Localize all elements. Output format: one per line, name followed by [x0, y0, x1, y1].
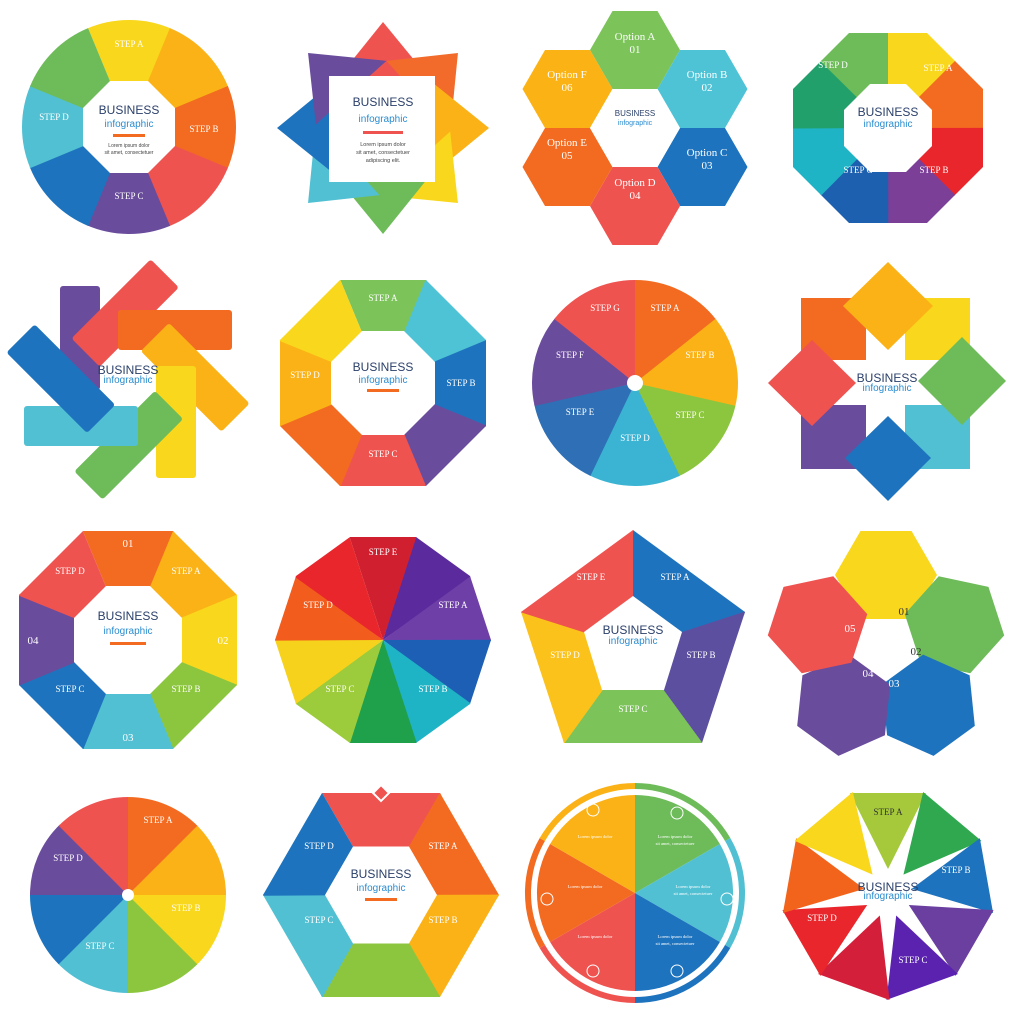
diagram 11: pentagon: STEP C: [619, 704, 647, 714]
diagram 8: squares and diamonds: [768, 262, 1006, 501]
diagram 2: star of triangles: adipiscing elit.: [366, 158, 401, 164]
diagram 15: circle with outer ring, 6 slices: Lorem ipsum dolor: [658, 834, 693, 839]
diagram 16: inward triangles: STEP B: [942, 865, 970, 875]
diagram 2: star of triangles: sit amet, consectetuer: [356, 150, 410, 156]
diagram 3: hexagon options: 06: [562, 82, 573, 94]
diagram 2: star of triangles: [273, 18, 493, 238]
diagram 3: hexagon options: Option E: [547, 137, 587, 149]
diagram 1: circle with 8 steps: STEP B: [190, 124, 218, 134]
diagram 6: octagon ring: STEP A: [369, 293, 398, 303]
diagram 14: hexagon 6 steps: STEP B: [429, 915, 457, 925]
diagram 10: decagon wheel: STEP A: [439, 600, 468, 610]
diagram 4: octagon 8 steps: BUSINESS: [858, 105, 918, 119]
diagram 11: pentagon: STEP D: [550, 650, 580, 660]
diagram 1: circle with 8 steps: infographic: [105, 119, 153, 130]
diagram 11: pentagon: [550, 572, 715, 714]
diagram 11: pentagon: STEP E: [577, 572, 606, 582]
diagram 13: circle 8 steps: [53, 815, 200, 951]
diagram 16: inward triangles: STEP D: [807, 913, 837, 923]
diagram 3: hexagon options: Option A: [615, 31, 655, 43]
diagram 4: octagon 8 steps: STEP B: [920, 165, 948, 175]
diagram 14: hexagon 6 steps: STEP A: [429, 841, 458, 851]
diagram 5: pinwheel rectangles: [6, 259, 250, 500]
diagram 9: octagon numbered: STEP B: [172, 684, 200, 694]
diagram 11: pentagon: infographic: [609, 636, 657, 647]
diagram 15: circle with outer ring, 6 slices: Lorem ipsum dolor: [658, 934, 693, 939]
diagram 12: five hexagons: 04: [862, 668, 874, 680]
diagram 9: octagon numbered: 03: [122, 732, 134, 744]
diagram 9: octagon numbered: 02: [218, 635, 228, 647]
diagram 9: octagon numbered: STEP C: [56, 684, 84, 694]
diagram 9: octagon numbered: infographic: [104, 626, 152, 637]
diagram 16: inward triangles: STEP A: [874, 807, 903, 817]
diagram 15: circle with outer ring, 6 slices: Lorem ipsum dolor: [578, 934, 613, 939]
diagram 14: hexagon 6 steps: [288, 785, 474, 988]
diagram 1: circle with 8 steps: STEP A: [115, 39, 144, 49]
diagram 7: circle 7 steps: [556, 303, 714, 443]
diagram 12: five hexagons: 03: [888, 678, 900, 690]
diagram 10: decagon wheel: STEP E: [369, 547, 398, 557]
diagram 6: octagon ring: [290, 293, 475, 468]
diagram 1: circle with 8 steps: Lorem ipsum dolor: [108, 143, 150, 149]
diagram 2: star of triangles: BUSINESS: [353, 95, 413, 109]
diagram 11: pentagon: STEP A: [661, 572, 690, 582]
diagram 3: hexagon options: BUSINESS: [615, 109, 655, 118]
diagram 16: inward triangles: [782, 792, 994, 1000]
diagram 6: octagon ring: STEP C: [369, 449, 397, 459]
diagram 14: hexagon 6 steps: BUSINESS: [351, 867, 411, 881]
diagram 9: octagon numbered: [28, 538, 228, 744]
diagram 7: circle 7 steps: STEP F: [556, 350, 584, 360]
diagram 6: octagon ring: BUSINESS: [353, 360, 413, 374]
diagram 14: hexagon 6 steps: infographic: [357, 883, 405, 894]
diagram 3: hexagon options: 02: [702, 82, 712, 94]
diagram 7: circle 7 steps: STEP E: [566, 407, 595, 417]
diagram 4: octagon 8 steps: STEP D: [818, 60, 848, 70]
diagram 15: circle with outer ring, 6 slices: Lorem ipsum dolor: [568, 884, 603, 889]
diagram 11: pentagon: BUSINESS: [603, 623, 663, 637]
diagram 14: hexagon 6 steps: STEP D: [304, 841, 334, 851]
diagram 6: octagon ring: STEP D: [290, 370, 320, 380]
diagram 13: circle 8 steps: STEP D: [53, 853, 83, 863]
diagram 3: hexagon options: 03: [702, 160, 713, 172]
diagram 16: inward triangles: STEP C: [899, 955, 927, 965]
diagram 1: circle with 8 steps: BUSINESS: [99, 103, 159, 117]
diagram 15: circle with outer ring, 6 slices: sit amet, consectetuer: [656, 841, 695, 847]
diagram 15: circle with outer ring, 6 slices: Lorem ipsum dolor: [578, 834, 613, 839]
diagram 9: octagon numbered: BUSINESS: [98, 609, 158, 623]
diagram 9: octagon numbered: STEP A: [172, 566, 201, 576]
diagram 6: octagon ring: infographic: [359, 375, 407, 386]
diagram 5: pinwheel rectangles: BUSINESS: [98, 363, 158, 377]
diagram 3: hexagon options: Option B: [687, 69, 727, 81]
diagram 5: pinwheel rectangles: infographic: [104, 375, 152, 386]
diagram 4: octagon 8 steps: infographic: [864, 119, 912, 130]
diagram 15: circle with outer ring, 6 slices: [525, 783, 745, 1003]
diagram 3: hexagon options: 04: [630, 190, 641, 202]
diagram 3: hexagon options: Option F: [547, 69, 587, 81]
diagram 9: octagon numbered: 01: [122, 538, 134, 550]
diagram 1: circle with 8 steps: STEP C: [115, 191, 143, 201]
diagram 16: inward triangles: BUSINESS: [858, 880, 918, 894]
diagram 2: star of triangles: infographic: [359, 114, 407, 125]
diagram 10: decagon wheel: STEP B: [419, 684, 447, 694]
diagram 15: circle with outer ring, 6 slices: Lorem ipsum dolor: [676, 884, 711, 889]
diagram 1: circle with 8 steps: sit amet, consectetuer: [105, 150, 154, 156]
diagram 9: octagon numbered: 04: [28, 635, 39, 647]
diagram 3: hexagon options: 01: [630, 44, 640, 56]
diagram 16: inward triangles: infographic: [864, 891, 912, 902]
diagram 4: octagon 8 steps: STEP A: [924, 63, 953, 73]
diagram 11: pentagon: STEP B: [687, 650, 715, 660]
diagram 12: five hexagons: 01: [898, 606, 910, 618]
diagram 3: hexagon options: [522, 11, 748, 245]
diagram 10: decagon wheel: STEP D: [303, 600, 333, 610]
diagram 7: circle 7 steps: STEP D: [620, 433, 650, 443]
diagram 12: five hexagons: 05: [844, 623, 856, 635]
diagram 3: hexagon options: infographic: [618, 120, 653, 127]
diagram 8: squares and diamonds: infographic: [863, 383, 911, 394]
diagram 12: five hexagons: [760, 531, 1012, 771]
diagram 15: circle with outer ring, 6 slices: sit amet, consectetuer: [674, 891, 713, 897]
diagram 4: octagon 8 steps: [818, 60, 953, 188]
diagram 3: hexagon options: 05: [562, 150, 573, 162]
diagram 1: circle with 8 steps: [39, 39, 218, 201]
diagram 1: circle with 8 steps: STEP D: [39, 112, 69, 122]
diagram 7: circle 7 steps: STEP C: [676, 410, 704, 420]
diagram 2: star of triangles: Lorem ipsum dolor: [360, 142, 406, 148]
diagram 13: circle 8 steps: STEP A: [144, 815, 173, 825]
diagram 15: circle with outer ring, 6 slices: sit amet, consectetuer: [656, 941, 695, 947]
diagram 6: octagon ring: STEP B: [447, 378, 475, 388]
diagram 13: circle 8 steps: STEP B: [172, 903, 200, 913]
diagram 10: decagon wheel: STEP C: [326, 684, 354, 694]
diagram 7: circle 7 steps: STEP G: [590, 303, 620, 313]
diagram 13: circle 8 steps: STEP C: [86, 941, 114, 951]
diagram 14: hexagon 6 steps: STEP C: [305, 915, 333, 925]
diagram 9: octagon numbered: STEP D: [55, 566, 85, 576]
diagram 12: five hexagons: 02: [910, 646, 922, 658]
diagram 3: hexagon options: Option D: [614, 177, 656, 189]
diagram 7: circle 7 steps: STEP B: [686, 350, 714, 360]
diagram 7: circle 7 steps: STEP A: [651, 303, 680, 313]
diagram 8: squares and diamonds: BUSINESS: [857, 371, 917, 385]
diagram 10: decagon wheel: [303, 547, 468, 716]
diagram 4: octagon 8 steps: STEP C: [844, 165, 872, 175]
diagram 3: hexagon options: Option C: [687, 147, 727, 159]
